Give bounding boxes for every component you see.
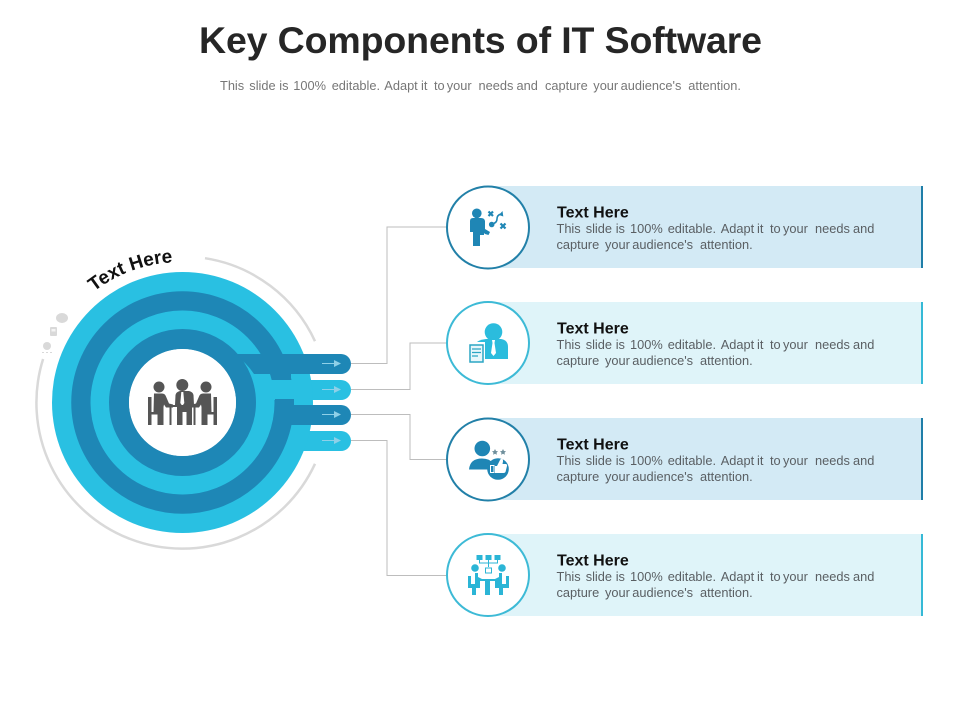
text block: capture	[556, 469, 599, 484]
text block: your	[783, 569, 809, 584]
text block: your	[605, 585, 631, 600]
dark bars	[234, 354, 351, 425]
subtitle: attention.	[688, 78, 741, 93]
icon: team meeting with flowchart	[468, 555, 509, 595]
text block: audience's	[632, 353, 693, 368]
light gap in dark ring	[262, 380, 302, 399]
subtitle: 100%	[293, 78, 326, 93]
icons: faint cloud, device, network	[42, 313, 68, 353]
text block: to	[770, 221, 781, 236]
text block: attention.	[700, 353, 753, 368]
panel: card 4	[447, 534, 923, 616]
text block: capture	[556, 585, 599, 600]
text block: it	[757, 221, 764, 236]
text block: capture	[556, 353, 599, 368]
white center	[129, 349, 236, 456]
text block: audience's	[632, 585, 693, 600]
text block: needs	[815, 453, 850, 468]
outer grey arcs	[36, 258, 315, 549]
dark ring stubs	[272, 372, 294, 415]
light bar connector	[250, 380, 300, 400]
text block: is	[616, 569, 625, 584]
text block: needs	[815, 221, 850, 236]
text block: Adapt	[721, 221, 755, 236]
text block: slide	[586, 337, 612, 352]
subtitle: audience's	[621, 78, 681, 93]
text block: your	[783, 453, 809, 468]
text block: This	[556, 337, 581, 352]
text block: Adapt	[721, 569, 755, 584]
text block: slide	[586, 569, 612, 584]
text block: Adapt	[721, 453, 755, 468]
text block: 100%	[630, 337, 663, 352]
text block: to	[770, 337, 781, 352]
subtitle: editable.	[332, 78, 380, 93]
subtitle: capture	[545, 78, 588, 93]
text block: audience's	[632, 237, 693, 252]
chart: concentric rings	[36, 258, 351, 549]
subtitle: slide	[249, 78, 276, 93]
text block	[556, 569, 874, 600]
text block: it	[757, 569, 764, 584]
ring: outer dark	[81, 301, 284, 504]
text block: attention.	[700, 469, 753, 484]
icon: person with document	[468, 323, 508, 364]
ring: inner dark	[119, 339, 246, 466]
subtitle: is	[279, 78, 289, 93]
heading: Text Here	[557, 552, 629, 570]
text block: editable.	[668, 453, 716, 468]
text block	[556, 453, 874, 484]
text block: 100%	[630, 453, 663, 468]
subtitle: Adapt	[384, 78, 418, 93]
text block: to	[770, 569, 781, 584]
subtitle: your	[593, 78, 619, 93]
ring: outer light	[52, 272, 313, 533]
text block: 100%	[630, 221, 663, 236]
text block: attention.	[700, 585, 753, 600]
text block: is	[616, 453, 625, 468]
text block: is	[616, 221, 625, 236]
text block: it	[757, 337, 764, 352]
text block: capture	[556, 237, 599, 252]
subtitle: needs	[478, 78, 513, 93]
heading: Text Here	[557, 204, 629, 222]
curved label: Text Here	[86, 252, 172, 289]
text block: This	[556, 221, 581, 236]
text block: editable.	[668, 221, 716, 236]
ring: inner light	[100, 320, 265, 485]
text block: it	[757, 453, 764, 468]
subtitle: your	[447, 78, 472, 93]
text block: slide	[586, 221, 612, 236]
text block: This	[556, 569, 581, 584]
text block: attention.	[700, 237, 753, 252]
text block: editable.	[668, 569, 716, 584]
panel: card 2	[447, 302, 923, 384]
text block: needs	[815, 569, 850, 584]
heading: Text Here	[557, 436, 629, 454]
text block	[556, 337, 874, 368]
heading: Text Here	[557, 320, 629, 338]
text block: audience's	[632, 469, 693, 484]
subtitle: it	[421, 78, 428, 93]
text block: your	[605, 469, 631, 484]
subtitle: and	[516, 78, 538, 93]
text block: and	[853, 453, 874, 468]
connector lines	[351, 227, 447, 576]
panel: card 1	[447, 186, 923, 268]
text block: slide	[586, 453, 612, 468]
text block: your	[783, 337, 809, 352]
text block: your	[605, 353, 631, 368]
text block: to	[770, 453, 781, 468]
subtitle: to	[434, 78, 445, 93]
text block: your	[783, 221, 809, 236]
text block: needs	[815, 337, 850, 352]
text block: and	[853, 569, 874, 584]
text block	[556, 221, 874, 252]
text block: your	[605, 237, 631, 252]
text block: Adapt	[721, 337, 755, 352]
arrows	[322, 360, 341, 444]
icon: person with thumbs up	[469, 441, 509, 480]
text block: and	[853, 221, 874, 236]
panel: card 3	[447, 418, 923, 500]
text block: is	[616, 337, 625, 352]
icon: three people at table	[148, 379, 217, 425]
text block: and	[853, 337, 874, 352]
text block: editable.	[668, 337, 716, 352]
light bars	[290, 380, 351, 451]
subtitle: This	[220, 78, 244, 93]
icon: presenter with strategy	[470, 208, 506, 246]
text block: 100%	[630, 569, 663, 584]
text block: This	[556, 453, 581, 468]
title: Key Components of IT Software	[199, 19, 762, 61]
